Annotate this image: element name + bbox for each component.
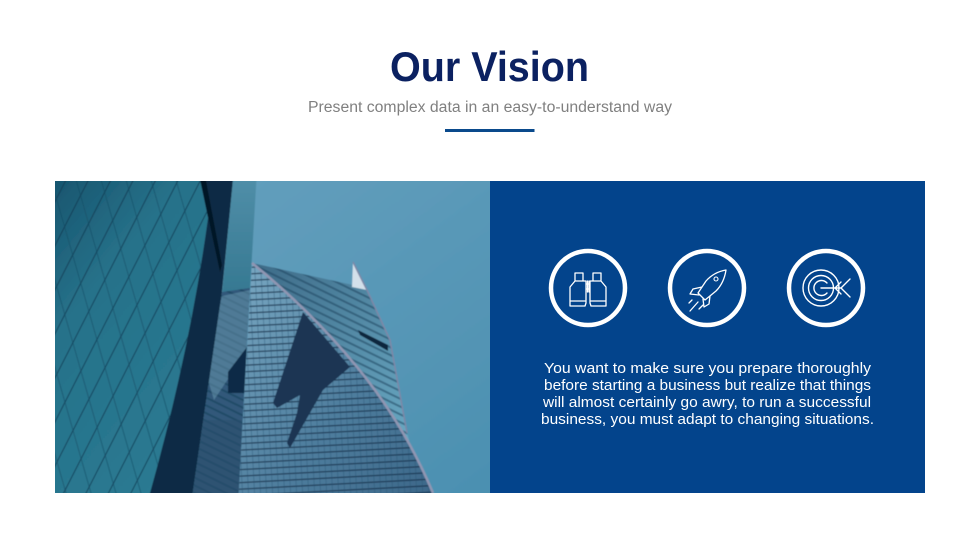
subtitle: Present complex data in an easy-to-understand way: [308, 99, 672, 116]
description text: business, you must adapt to changing situations.: [541, 411, 874, 428]
icon: target: [789, 251, 863, 325]
photo: skyscrapers: [55, 181, 490, 493]
title underline: [445, 129, 534, 132]
description text: You want to make sure you prepare thoroughly: [544, 360, 872, 377]
description text: [541, 360, 874, 428]
icon: binoculars: [551, 251, 625, 325]
panel: vision: [490, 181, 925, 493]
icon: rocket: [670, 251, 744, 325]
description text: will almost certainly go awry, to run a successful: [542, 394, 871, 411]
title: Our Vision: [390, 43, 589, 90]
description text: before starting a business but realize that things: [544, 377, 871, 394]
